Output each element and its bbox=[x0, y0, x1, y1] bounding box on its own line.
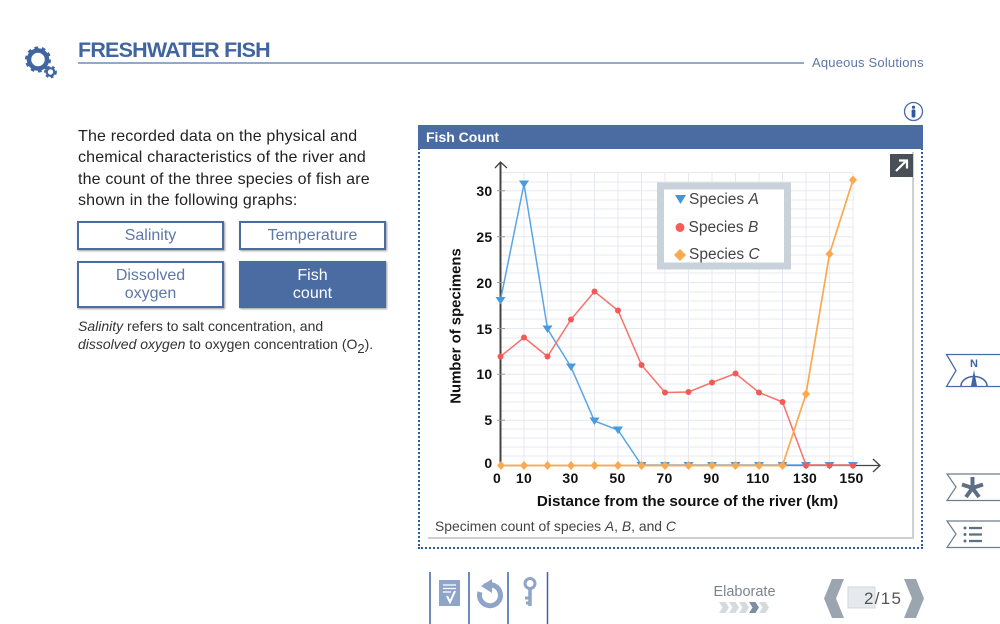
intro text: shown in the following graphs: bbox=[78, 192, 297, 209]
icon: info bbox=[904, 102, 924, 122]
side tab: north: N bbox=[970, 358, 978, 370]
header rule bbox=[78, 62, 804, 64]
button: salinity bbox=[77, 221, 224, 250]
button: fish count bbox=[239, 261, 386, 308]
side tab: list bbox=[947, 521, 1000, 548]
legend: Species A bbox=[689, 191, 759, 208]
page number: 2/15 bbox=[864, 589, 902, 608]
panel: fish count bbox=[418, 125, 923, 549]
next arrow bbox=[904, 579, 924, 618]
x axis labels: 90 bbox=[703, 470, 720, 486]
title: FRESHWATER FISH bbox=[78, 38, 270, 62]
button: fish count: count bbox=[293, 285, 332, 302]
icon: reset bbox=[479, 579, 500, 606]
series A bbox=[496, 180, 858, 470]
button: dissolved oxygen: oxygen bbox=[125, 285, 176, 302]
icon: worksheet bbox=[439, 580, 460, 606]
legend bbox=[660, 186, 788, 266]
button: dissolved oxygen bbox=[77, 261, 224, 308]
x axis labels bbox=[493, 470, 864, 486]
legend: Species B bbox=[688, 219, 758, 236]
x axis labels: 30 bbox=[562, 470, 579, 486]
y axis labels: 0 bbox=[484, 455, 492, 471]
y axis labels: 5 bbox=[484, 412, 492, 428]
intro text: The recorded data on the physical and bbox=[78, 128, 357, 145]
x axis labels: 10 bbox=[516, 470, 532, 486]
note text bbox=[78, 318, 373, 355]
toolbar dividers bbox=[430, 572, 548, 624]
y axis labels: 20 bbox=[476, 275, 492, 291]
side tab: north bbox=[946, 354, 1000, 386]
button: temperature bbox=[239, 221, 386, 250]
y axis labels: 10 bbox=[476, 366, 492, 382]
y axis labels bbox=[476, 183, 492, 471]
y axis labels: 25 bbox=[476, 229, 492, 245]
legend: Species C bbox=[689, 246, 760, 263]
button: salinity: Salinity bbox=[125, 227, 176, 244]
chart card bbox=[428, 152, 914, 539]
side tab: asterisk bbox=[947, 474, 1000, 500]
icon: key bbox=[525, 578, 535, 606]
intro text: chemical characteristics of the river and bbox=[78, 149, 366, 166]
intro text: the count of the three species of fish are bbox=[78, 171, 370, 188]
axes bbox=[495, 162, 880, 472]
previous arrow bbox=[824, 579, 844, 618]
series B bbox=[498, 288, 856, 468]
button: dissolved oxygen: Dissolved bbox=[116, 267, 185, 284]
note text: dissolved oxygen to oxygen concentration (O2). bbox=[78, 336, 373, 355]
series C bbox=[497, 176, 857, 470]
y axis title: Number of specimens bbox=[448, 248, 464, 404]
elaborate label: Elaborate bbox=[713, 584, 776, 600]
x axis labels: 50 bbox=[609, 470, 626, 486]
page number box bbox=[848, 587, 875, 608]
x axis title: Distance from the source of the river (km) bbox=[537, 493, 838, 510]
x axis labels: 150 bbox=[839, 470, 864, 486]
x axis labels: 0 bbox=[493, 470, 501, 486]
panel header: Fish Count bbox=[426, 129, 499, 145]
progress chevrons bbox=[719, 602, 769, 613]
icon: expand bbox=[890, 154, 913, 177]
button: temperature: Temperature bbox=[268, 227, 357, 244]
x axis labels: 70 bbox=[656, 470, 673, 486]
panel header bbox=[418, 125, 923, 149]
button: fish count: Fish bbox=[297, 267, 328, 284]
y axis labels: 30 bbox=[476, 183, 492, 199]
x axis labels: 130 bbox=[793, 470, 817, 486]
note text: Salinity refers to salt concentration, and bbox=[78, 318, 323, 334]
intro text bbox=[78, 128, 370, 209]
icon: gears bbox=[25, 46, 57, 78]
x axis labels: 110 bbox=[746, 470, 770, 486]
chart caption: Specimen count of species A, B, and C bbox=[435, 518, 677, 534]
subtitle: Aqueous Solutions bbox=[812, 55, 924, 70]
y axis labels: 15 bbox=[476, 321, 492, 337]
